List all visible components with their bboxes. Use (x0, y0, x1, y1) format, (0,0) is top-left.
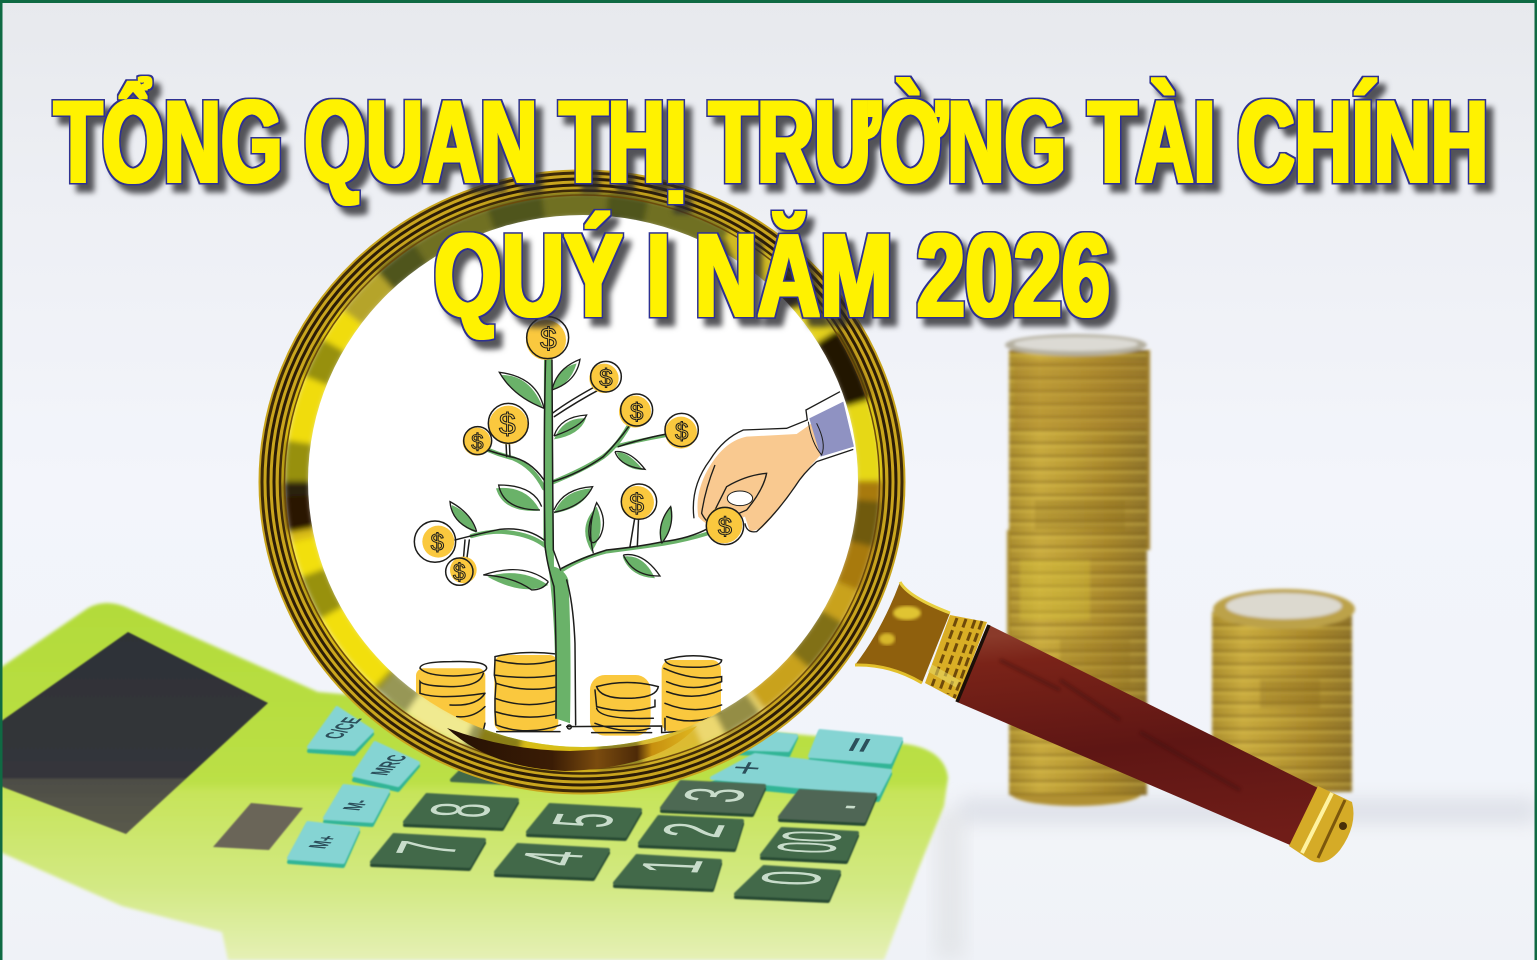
coin stack tall (1005, 334, 1150, 806)
branch outlines (455, 358, 708, 725)
key labels: M- (337, 799, 376, 812)
key labels (303, 716, 886, 887)
magnifying glass lens (262, 173, 902, 791)
coins on tree: $ (499, 408, 516, 441)
trunk and stems (543, 357, 571, 723)
ring stripes (262, 173, 902, 791)
coin stacks yellow (416, 655, 721, 736)
coins on tree: $ (675, 418, 688, 445)
inner glossy band (297, 205, 869, 757)
key labels: 5 (535, 811, 634, 829)
key labels: . (780, 801, 875, 812)
calculator (0, 603, 948, 960)
dark key sides (372, 785, 875, 901)
wooden handle (957, 625, 1318, 845)
key labels: 7 (379, 839, 478, 857)
lens white (308, 215, 858, 747)
handle neck (855, 582, 950, 683)
leaves (450, 359, 672, 590)
solar panel (213, 803, 303, 850)
handle grain (1000, 660, 1240, 790)
calculator screen (0, 632, 268, 834)
coins on tree: $ (471, 429, 483, 454)
coins on tree (414, 317, 744, 585)
title line 2: QUÝ I NĂM 2026 (434, 210, 1110, 342)
ferrule (925, 615, 989, 702)
coins on tree: $ (718, 513, 732, 541)
coins on tree: $ (431, 530, 444, 557)
key labels: C/CE (318, 716, 369, 740)
teal key sides (289, 711, 901, 866)
key labels: + (717, 760, 777, 776)
title (54, 76, 1488, 342)
hand (693, 392, 854, 532)
lens ring (262, 173, 902, 791)
coins on tree: $ (599, 365, 613, 392)
coin stack lines (420, 652, 722, 733)
key labels: M+ (303, 835, 344, 850)
teal keys (289, 708, 901, 862)
coins on tree: $ (453, 559, 466, 585)
outer band base (272, 183, 892, 781)
key labels: 3 (666, 786, 765, 804)
coins on tree: $ (629, 489, 644, 519)
ring bottom crescent (447, 726, 697, 771)
calculator body (0, 603, 948, 960)
dark green keys (372, 762, 875, 898)
coins on tree: $ (630, 399, 643, 426)
magnifying glass handle (855, 582, 1354, 862)
key labels: = (834, 736, 886, 754)
key labels: MRC (365, 754, 414, 777)
key labels: 1 (623, 857, 722, 875)
key labels: 2 (645, 821, 744, 839)
key labels: 0 (743, 869, 842, 887)
end cap (1289, 786, 1354, 862)
plant illustration (414, 317, 854, 736)
key labels: 8 (412, 801, 511, 819)
coins on tree: $ (540, 322, 557, 355)
table shadow band (935, 798, 1537, 960)
coin stack short (1212, 589, 1355, 792)
key labels: 00 (758, 829, 861, 855)
key labels: 4 (504, 849, 603, 867)
